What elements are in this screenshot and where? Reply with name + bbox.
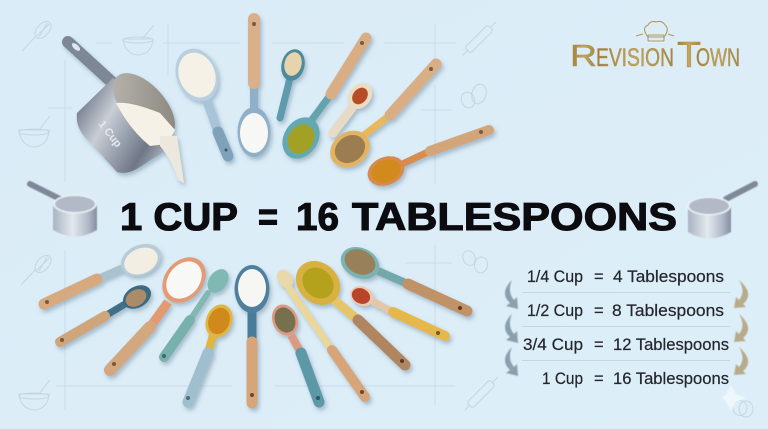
arrow xyxy=(505,280,518,309)
spoon: cumin xyxy=(336,241,467,311)
icon: eggs xyxy=(461,249,489,274)
row: 1 cup: 16 Tablespoons xyxy=(613,370,729,388)
title: 1 CUP xyxy=(120,196,238,239)
sparkle xyxy=(722,385,746,411)
row: 1/2 cup: 8 Tablespoons xyxy=(612,302,724,320)
logo: RevisionTown xyxy=(570,21,740,75)
arrow xyxy=(505,314,518,343)
spoon: salt xyxy=(110,249,215,370)
blueprint grid lines xyxy=(48,24,456,410)
title: 16 xyxy=(296,196,339,239)
icon: rolling pin xyxy=(462,374,501,413)
row: 1/2 cup: 1/2 Cup xyxy=(527,302,583,320)
row dividers xyxy=(522,292,730,360)
icon: mixing bowl xyxy=(123,25,154,55)
icon: eggs xyxy=(459,83,488,110)
icon: chef hat xyxy=(636,21,674,41)
spoon: turmeric xyxy=(186,300,237,402)
logo wordmark xyxy=(570,34,740,75)
logo wordmark: EVISION xyxy=(596,44,674,72)
spoon: paprika xyxy=(333,78,377,133)
spoon: sugar xyxy=(238,19,270,157)
cup label: 1 Cup xyxy=(96,118,124,150)
logo wordmark: T xyxy=(677,34,701,75)
icon: mixing bowl xyxy=(19,380,50,410)
arrow xyxy=(734,280,748,308)
row: 1/2 cup: = xyxy=(594,302,604,320)
spoon: olive oil xyxy=(287,252,405,365)
measuring cup pouring flour xyxy=(68,42,186,183)
cup handle xyxy=(68,42,115,85)
row: 3/4 cup: 12 Tablespoons xyxy=(613,336,729,354)
arrow xyxy=(734,314,748,342)
title xyxy=(120,196,677,239)
arrow xyxy=(734,347,748,375)
row: 1/4 cup: 4 Tablespoons xyxy=(613,268,724,286)
cup interior xyxy=(102,62,186,150)
icon: whisk xyxy=(22,19,54,51)
row: 1/2 cup xyxy=(527,302,724,320)
spoon: herbs xyxy=(267,300,320,402)
spoon: olive oil xyxy=(275,38,366,166)
icon: rolling pin xyxy=(460,19,499,58)
cup body xyxy=(77,78,174,173)
row: 3/4 cup xyxy=(523,336,729,354)
row: 3/4 cup: = xyxy=(594,336,604,354)
small measuring cup, left xyxy=(30,184,97,236)
spoon: small beige xyxy=(278,47,308,118)
row: 1 cup: 1 Cup xyxy=(542,370,583,388)
small measuring cup, right xyxy=(687,184,755,238)
flour stream xyxy=(160,136,184,183)
row: 1/4 cup xyxy=(527,268,724,286)
spoon: turmeric xyxy=(363,130,489,191)
arrow xyxy=(505,347,518,376)
logo wordmark: OWN xyxy=(696,44,740,72)
row: 1/4 cup: = xyxy=(594,268,604,286)
spoon: long cream xyxy=(274,267,365,397)
arrows: left column xyxy=(505,280,518,376)
spoon: cumin xyxy=(323,64,436,175)
conversion table xyxy=(522,268,730,388)
spoon: brown powder xyxy=(60,280,155,342)
title: TABLESPOONS xyxy=(352,196,677,239)
spoon: flour xyxy=(44,238,166,304)
spoon: sugar xyxy=(234,265,270,403)
spoon: flour xyxy=(168,42,228,156)
icon: eggs xyxy=(733,400,753,417)
row: 1 cup: = xyxy=(594,370,604,388)
spoon: paprika xyxy=(347,282,445,336)
arrows: right column xyxy=(734,280,748,375)
row: 3/4 cup: 3/4 Cup xyxy=(523,336,583,354)
title: = xyxy=(258,196,278,239)
row: 1/4 cup: 1/4 Cup xyxy=(527,268,583,286)
icon: whisk xyxy=(21,253,54,285)
flour in cup xyxy=(116,103,175,146)
spoon: teal xyxy=(162,265,233,358)
icon: mixing bowl xyxy=(19,116,50,147)
row: 1 cup xyxy=(542,370,729,388)
logo wordmark: R xyxy=(570,38,597,73)
